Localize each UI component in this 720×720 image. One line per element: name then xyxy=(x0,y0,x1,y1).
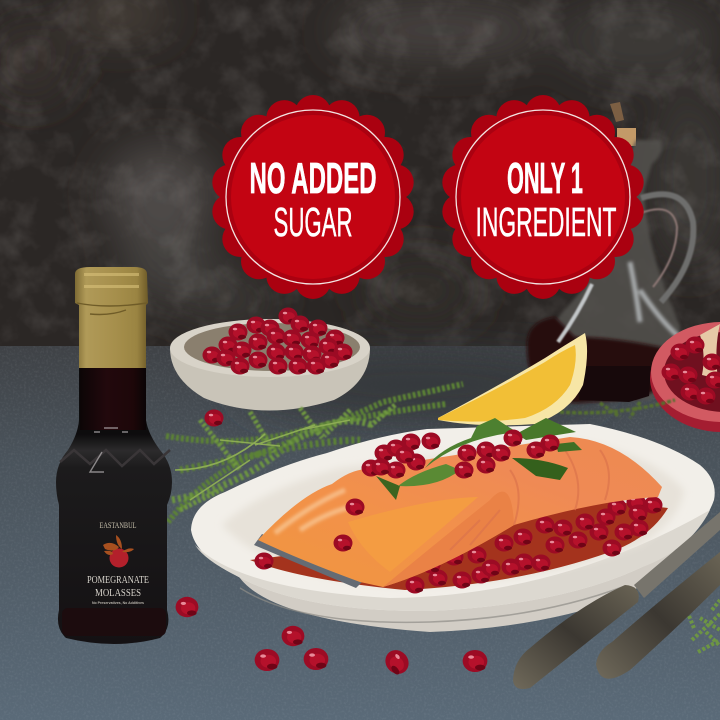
plate rim xyxy=(191,424,715,611)
handle xyxy=(641,194,693,302)
badge text: ONLY 1 xyxy=(507,154,583,203)
herb leaves xyxy=(376,418,582,500)
plate with salmon xyxy=(191,418,715,632)
badge: no added sugar xyxy=(212,95,414,299)
bowl of pomegranate seeds xyxy=(170,308,370,411)
carafe of molasses xyxy=(527,102,693,403)
dark liquid xyxy=(527,317,670,403)
badge: only 1 ingredient xyxy=(442,95,644,299)
glass highlights xyxy=(558,284,592,342)
seeds on salmon xyxy=(334,430,560,552)
plate well xyxy=(222,440,684,586)
product name: POMEGRANATE xyxy=(87,575,149,586)
sauce xyxy=(250,500,668,590)
salmon fillet xyxy=(258,437,662,587)
loose pomegranate seeds on table xyxy=(176,410,487,679)
gold foil cap xyxy=(75,267,148,368)
badge text: SUGAR xyxy=(274,199,352,245)
pomegranate icon xyxy=(103,535,134,568)
bottle shoulder ridges xyxy=(60,450,170,466)
bottle body xyxy=(56,368,172,644)
background: dark stone wall xyxy=(0,0,720,350)
tagline: No Preservatives, No Additives xyxy=(92,600,145,605)
label xyxy=(87,521,149,605)
molasses bottle xyxy=(56,267,172,644)
background: slate table xyxy=(0,346,720,720)
lemon wedge xyxy=(438,333,587,425)
plate foot xyxy=(236,500,684,632)
badge text xyxy=(476,154,616,245)
fork handle xyxy=(596,552,720,679)
badge text xyxy=(250,154,376,245)
seeds under salmon xyxy=(254,494,662,594)
label: MOLASSES xyxy=(95,588,141,599)
glass body xyxy=(542,140,680,402)
bowl body xyxy=(170,348,370,411)
knife neck xyxy=(634,512,720,598)
salmon skin xyxy=(254,534,364,588)
badge text: NO ADDED xyxy=(250,154,376,203)
seeds xyxy=(202,308,352,374)
cutlery xyxy=(513,512,720,689)
brand name: EASTANBUL xyxy=(100,521,137,530)
pomegranate half xyxy=(650,322,720,432)
knife handle xyxy=(513,585,639,689)
stopper xyxy=(610,102,636,146)
thyme sprigs xyxy=(166,384,720,652)
